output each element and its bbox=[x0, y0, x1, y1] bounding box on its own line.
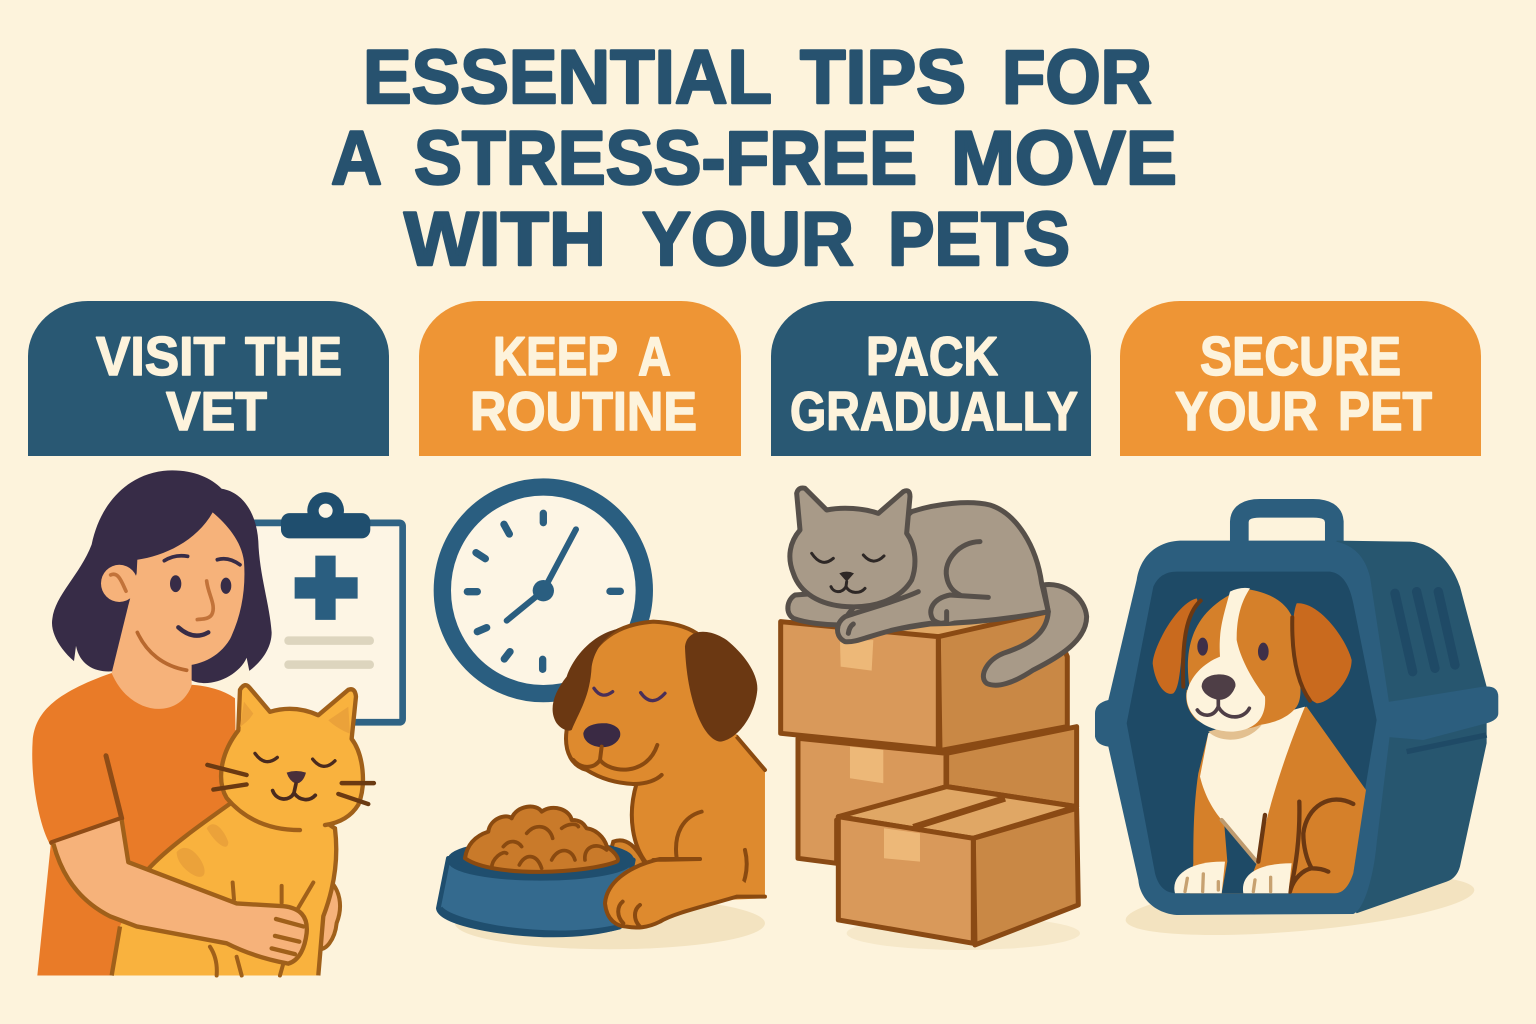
dog food kibble bbox=[465, 807, 618, 872]
far hand bbox=[318, 879, 340, 949]
puppy bbox=[1153, 588, 1366, 893]
top cardboard box bbox=[781, 597, 1067, 751]
heading tab: visit the vet bbox=[28, 301, 389, 456]
title: ESSENTIAL bbox=[363, 35, 772, 120]
middle cardboard box bbox=[798, 727, 1077, 863]
grey cat bbox=[788, 488, 1087, 685]
title: TIPS bbox=[800, 35, 966, 120]
heading tab: secure your pet: SECURE bbox=[1200, 325, 1401, 387]
woman shirt bbox=[32, 673, 237, 975]
dog body bbox=[632, 737, 765, 902]
heading tab: visit the vet: VISIT bbox=[96, 325, 225, 387]
heading tab: visit the vet: THE bbox=[245, 325, 342, 387]
sleeve line bbox=[52, 756, 122, 843]
illustration: cat sleeping on moving boxes bbox=[781, 488, 1087, 950]
woman arm and hand bbox=[53, 820, 307, 964]
illustration: sleeping dog with clock and food bowl bbox=[438, 487, 765, 949]
heading tab: pack gradually: GRADUALLY bbox=[790, 380, 1078, 442]
woman hair bbox=[52, 470, 272, 683]
title: STRESS-FREE bbox=[414, 116, 917, 201]
ground shadow bbox=[455, 897, 765, 949]
carrier body side bbox=[1290, 541, 1498, 913]
ground shadow bbox=[847, 917, 1080, 950]
heading tab: keep a routine: A bbox=[638, 325, 671, 387]
icon: wall clock bbox=[442, 487, 644, 694]
illustration: puppy in pet carrier bbox=[1095, 508, 1498, 946]
heading tab: visit the vet: VET bbox=[166, 380, 267, 442]
heading tab: secure your pet: YOUR bbox=[1175, 380, 1318, 442]
carrier opening bbox=[1127, 572, 1377, 893]
heading tab: secure your pet bbox=[1120, 301, 1481, 456]
title: MOVE bbox=[951, 116, 1177, 201]
cat head bbox=[207, 685, 374, 830]
heading tab: keep a routine: ROUTINE bbox=[470, 380, 697, 442]
heading tab: keep a routine bbox=[419, 301, 741, 456]
heading tab: pack gradually bbox=[771, 301, 1091, 456]
cat body bbox=[112, 801, 336, 975]
title: FOR bbox=[1002, 35, 1152, 120]
title: WITH bbox=[404, 197, 606, 282]
carrier handle bbox=[1239, 508, 1334, 545]
ground shadow bbox=[1123, 864, 1477, 946]
heading tab: secure your pet: PET bbox=[1338, 380, 1432, 442]
title bbox=[331, 35, 1177, 282]
woman neck and face bbox=[101, 512, 244, 709]
dog bowl bbox=[438, 807, 633, 935]
icon: medical clipboard bbox=[250, 492, 403, 722]
illustration: woman holding cat with clipboard bbox=[32, 470, 403, 975]
dog front paw bbox=[605, 859, 765, 928]
dog head bbox=[553, 622, 757, 784]
heading tab: keep a routine: KEEP bbox=[493, 325, 618, 387]
title: YOUR bbox=[642, 197, 854, 282]
title: A bbox=[331, 116, 382, 201]
title: PETS bbox=[888, 197, 1070, 282]
carrier front frame bbox=[1095, 541, 1392, 915]
heading tab: pack gradually: PACK bbox=[866, 325, 998, 387]
dog back paw bbox=[610, 840, 647, 868]
front cardboard box bbox=[838, 787, 1078, 945]
